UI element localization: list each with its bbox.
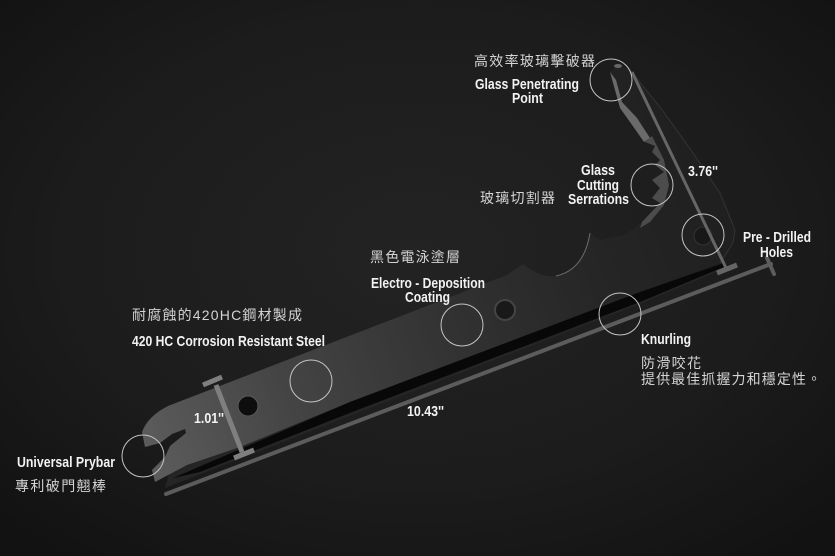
- label: glass cutting serrations: Cutting: [577, 177, 619, 194]
- label: electro-deposition coating: Electro - Deposition: [371, 275, 485, 292]
- hole: middle: [495, 300, 515, 320]
- label: glass penetrating point: 高效率玻璃擊破器: [474, 53, 595, 69]
- cutout edge highlight: [556, 233, 590, 276]
- label: electro-deposition coating: Coating: [405, 289, 450, 306]
- label: knurling: 防滑咬花: [641, 355, 701, 371]
- label: 3.76 inches: 3.76'': [688, 163, 718, 180]
- label: 420HC steel: 420 HC Corrosion Resistant Steel: [132, 333, 325, 350]
- label: glass cutting serrations: Serrations: [568, 191, 629, 208]
- label: knurling: Knurling: [641, 331, 691, 348]
- blade taper: [610, 72, 650, 142]
- label: universal prybar: [15, 454, 115, 494]
- dimension 1.01 line: [203, 377, 254, 458]
- label: glass penetrating point: [474, 53, 595, 107]
- label: pre-drilled holes: [743, 229, 811, 261]
- callout circles: [122, 59, 724, 477]
- head outer edge: [630, 70, 735, 263]
- label: pre-drilled holes: Pre - Drilled: [743, 229, 811, 246]
- label: 420HC steel: [132, 307, 325, 350]
- label: electro-deposition coating: [370, 249, 485, 306]
- label: glass cutting serrations: 玻璃切割器: [480, 190, 555, 206]
- label: pre-drilled holes: Holes: [760, 244, 793, 261]
- label: glass penetrating point: Glass Penetrating: [475, 76, 579, 93]
- serrations: [640, 136, 669, 228]
- label: universal prybar: Universal Prybar: [17, 454, 115, 471]
- tool lower flank: [165, 268, 726, 488]
- label: knurling: [641, 331, 821, 387]
- dimension 3.76 line: [632, 72, 737, 273]
- tip blob: [614, 64, 622, 68]
- label: 1.01 inches: 1.01'': [194, 410, 224, 427]
- label: electro-deposition coating: 黑色電泳塗層: [370, 249, 460, 265]
- label: knurling: 提供最佳抓握力和穩定性。: [641, 371, 821, 387]
- label: glass cutting serrations: Glass: [581, 162, 615, 179]
- label: glass penetrating point: Point: [512, 90, 543, 107]
- tool main silhouette: [142, 65, 735, 482]
- label: 10.43 inches: 10.43'': [407, 403, 444, 420]
- black knurling stripe: [173, 263, 726, 478]
- tool: prybar body: [142, 64, 735, 488]
- dimension 10.43 line: [166, 258, 774, 494]
- hole: left: [238, 396, 258, 416]
- label: glass cutting serrations: [480, 162, 629, 208]
- hole: right: [694, 227, 712, 245]
- label: 420HC steel: 耐腐蝕的420HC鋼材製成: [132, 307, 302, 323]
- label: universal prybar: 專利破門翹棒: [15, 478, 106, 494]
